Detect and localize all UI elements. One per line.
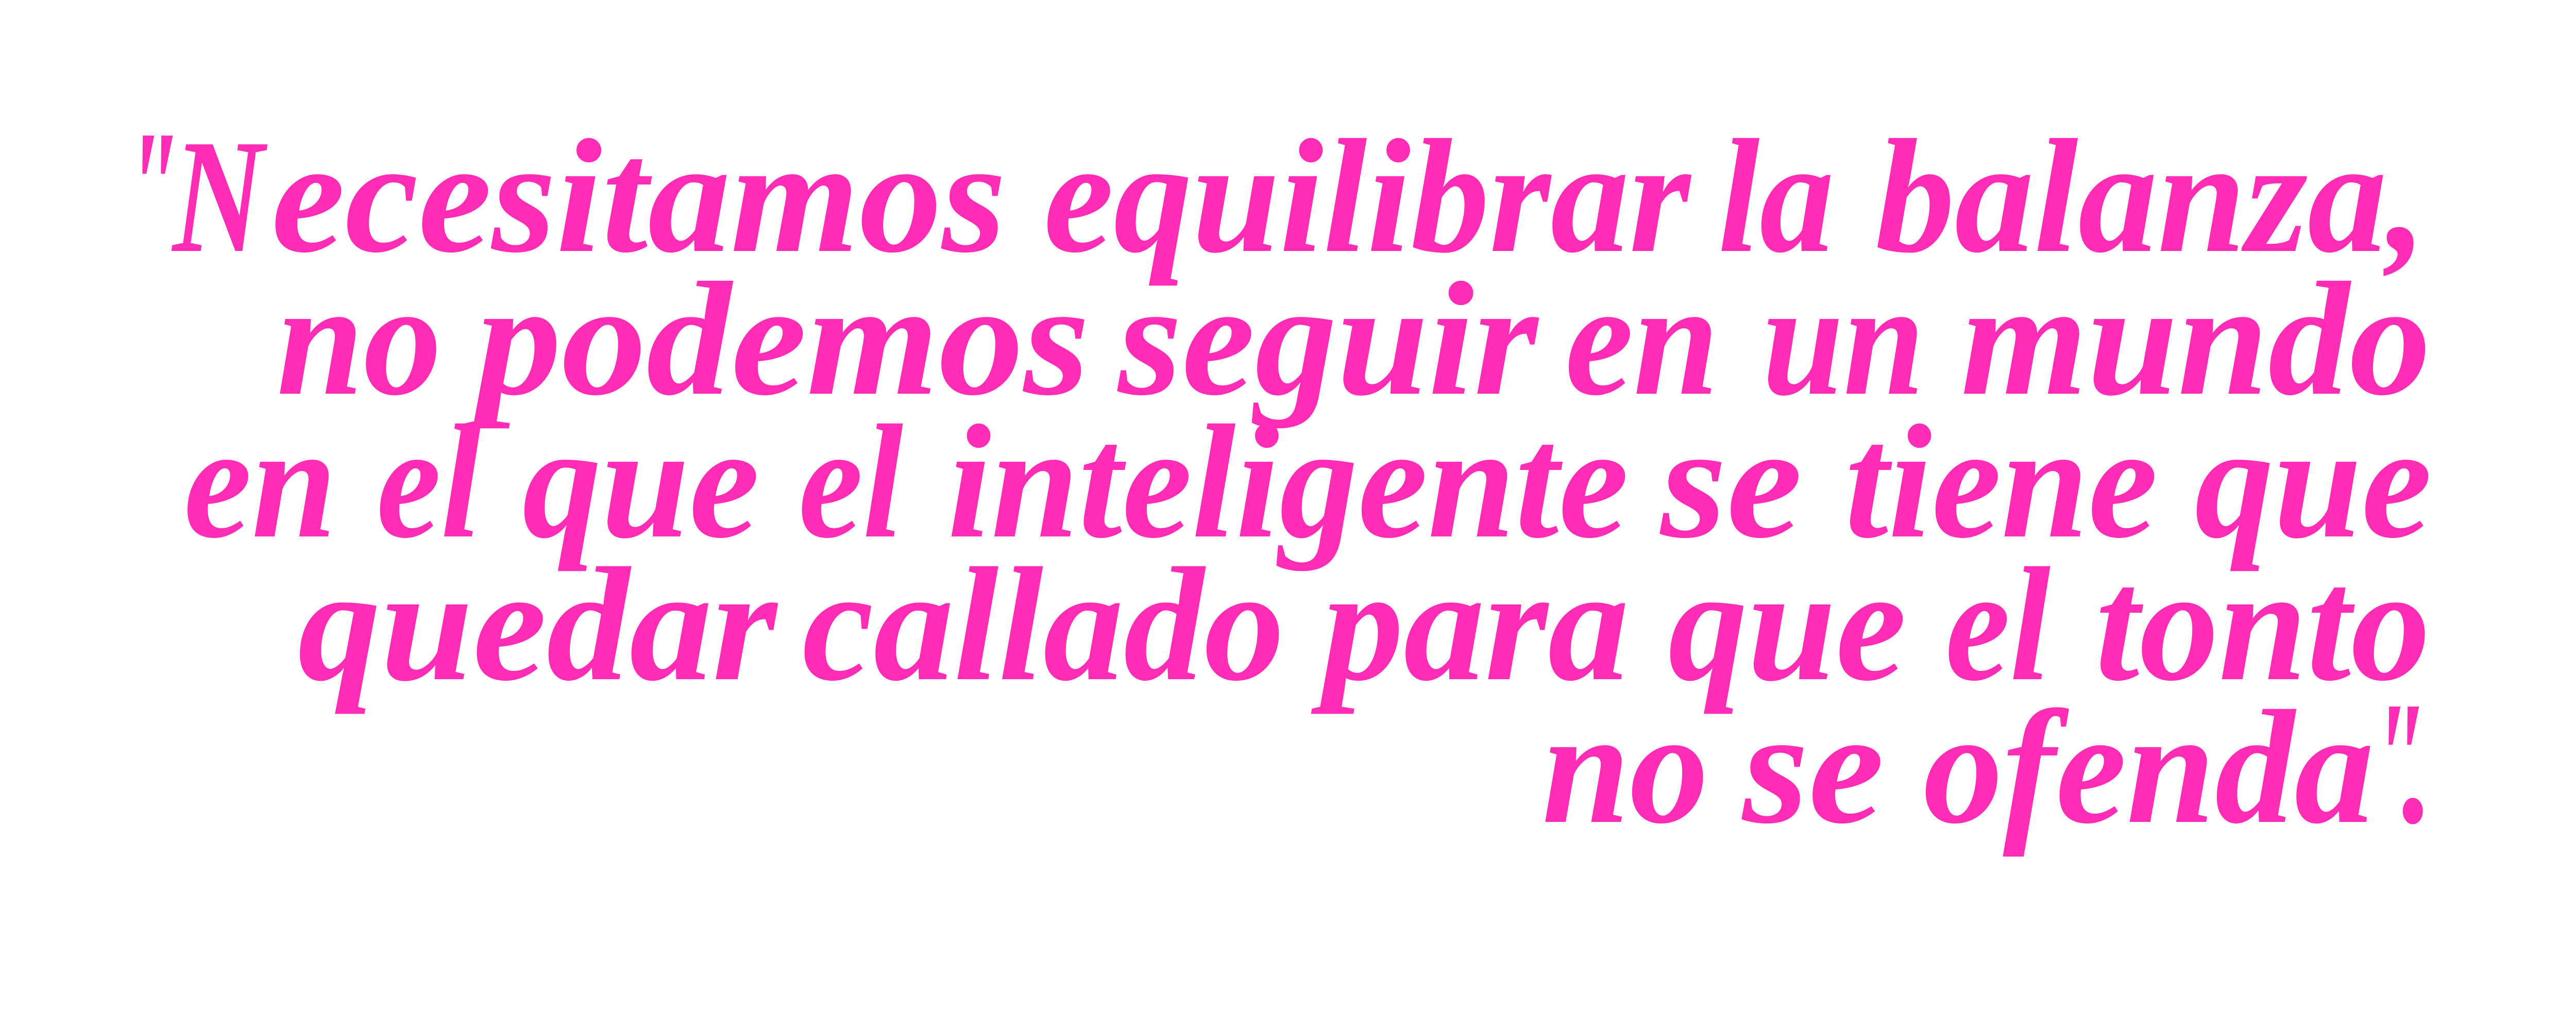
- quote line 1: ecesitamos: [272, 106, 1006, 287]
- quote line 3: se: [1658, 392, 1802, 572]
- quote line 5: no: [1542, 677, 1708, 857]
- quote line 2: en: [1565, 249, 1719, 429]
- quote line 3: [184, 392, 2432, 572]
- quote line 2: podemos: [463, 249, 1090, 429]
- quote line 1: N: [171, 106, 269, 287]
- quote line 4: [298, 534, 2430, 715]
- quote line 3: el: [799, 392, 904, 572]
- quote line 3: que: [522, 392, 759, 572]
- quote line 1: balanza,: [1875, 106, 2427, 287]
- quote line 2: [277, 249, 2431, 429]
- quote line 3: que: [2195, 392, 2432, 572]
- quote line 5: ofenda: [1923, 677, 2374, 857]
- quote line 1: [125, 97, 2427, 287]
- quote line 2: seguir: [1115, 249, 1540, 429]
- quote line 3: inteligente: [947, 392, 1629, 572]
- quote line 3: tiene: [1845, 392, 2158, 572]
- quote line 5: .: [2402, 677, 2433, 857]
- quote line 1: ": [125, 97, 179, 278]
- quote line 5: se: [1740, 677, 1884, 857]
- quote line 4: tonto: [2095, 534, 2430, 715]
- quote line 4: que: [1668, 534, 1906, 715]
- quote line 4: quedar: [298, 534, 779, 715]
- quote line 4: callado: [802, 534, 1284, 715]
- quote line 3: en: [184, 392, 336, 572]
- quote line 1: equilibrar: [1044, 106, 1693, 287]
- quote line 5: [1542, 668, 2433, 857]
- quote line 2: un: [1762, 249, 1924, 429]
- quote line 1: la: [1718, 106, 1834, 287]
- quote line 2: mundo: [1961, 249, 2431, 429]
- quote line 3: el: [377, 392, 482, 572]
- quote line 2: no: [277, 249, 442, 429]
- quote line 4: para: [1310, 534, 1629, 715]
- quote line 5: ": [2371, 668, 2426, 849]
- quote line 4: el: [1945, 534, 2051, 715]
